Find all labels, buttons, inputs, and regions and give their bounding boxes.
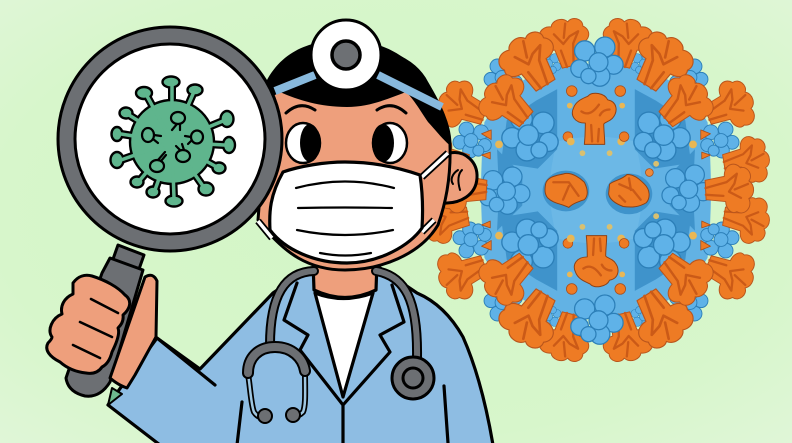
virus body — [481, 64, 711, 316]
shirt — [315, 293, 373, 397]
magnifier handle — [66, 245, 144, 396]
head and face — [258, 48, 450, 270]
spike tips — [110, 76, 235, 206]
core — [130, 100, 214, 184]
eyebrows — [286, 106, 406, 113]
small green virus — [110, 76, 235, 206]
thumb and palm — [110, 275, 157, 388]
spikes — [121, 86, 224, 198]
virus highlight — [550, 137, 642, 243]
fist — [47, 275, 130, 373]
mask straps — [258, 153, 448, 238]
virus axis clusters and spikes — [437, 37, 755, 344]
headband — [275, 75, 442, 107]
eye left — [286, 123, 320, 163]
sleeve cuff — [108, 388, 122, 405]
head mirror — [311, 20, 381, 90]
neck — [313, 262, 377, 298]
virus: large blue coronavirus with orange spikes — [419, 13, 773, 367]
ear — [443, 153, 477, 203]
coat lapels — [157, 283, 448, 443]
stethoscope — [248, 271, 434, 423]
face mask — [270, 162, 423, 263]
spike stems — [121, 86, 224, 198]
hand holding magnifier — [47, 275, 157, 388]
virus quadrants with spikes and protein clusters — [419, 13, 773, 367]
coat — [108, 268, 493, 443]
hair — [266, 40, 451, 146]
core bumps — [142, 112, 203, 172]
magnifying glass — [58, 27, 282, 251]
eye right — [372, 123, 407, 163]
doctor coat and body — [108, 262, 493, 443]
